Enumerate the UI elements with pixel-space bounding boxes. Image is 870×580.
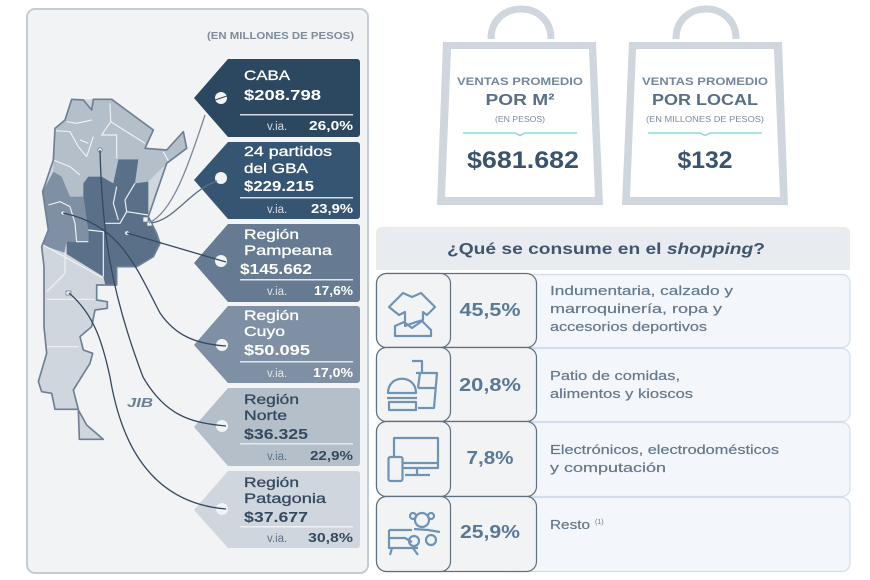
- tag: Norte: Región: [244, 391, 299, 407]
- bag: ventas por m2: VENTAS PROMEDIO: [457, 76, 584, 88]
- tag: Cuyo: Región: [244, 307, 299, 323]
- tag: Patagonia: $37.677: [244, 509, 308, 526]
- tag: GBA: [194, 142, 360, 219]
- tag: CABA: v.ia.: [267, 121, 287, 133]
- tag: Pampeana: Región: [244, 226, 299, 242]
- icon: toys: [389, 513, 440, 555]
- tag: CABA: $208.798: [244, 87, 321, 104]
- heading bar: ¿Qué se consume en el shopping ?: [447, 241, 765, 258]
- row: indumentaria: 45,5%: [460, 300, 520, 320]
- row: comidas: alimentos y kioscos: [550, 386, 694, 401]
- tag: Pampeana: $145.662: [240, 261, 312, 278]
- tag: Patagonia: v.ia.: [267, 533, 287, 545]
- leader lines: [63, 115, 226, 509]
- tag: Cuyo: v.ia.: [267, 368, 287, 380]
- location dots: [61, 148, 152, 295]
- icon: monitor and phone: [388, 438, 438, 481]
- row: electronicos: y computación: [550, 460, 666, 475]
- tag: Cuyo: $50.095: [244, 342, 310, 359]
- tag: GBA: $229.215: [244, 178, 314, 195]
- row: electronicos: 7,8%: [466, 448, 514, 468]
- icon: t-shirt and shoe: [389, 293, 435, 336]
- row: resto: Resto: [550, 517, 590, 532]
- tag: Pampeana: Pampeana: [244, 242, 332, 258]
- row: comidas: [376, 348, 850, 422]
- tag: Norte: 22,9%: [310, 448, 353, 463]
- bag: ventas por m2: POR M²: [486, 92, 554, 109]
- tag: GBA: del GBA: [244, 160, 309, 176]
- bag: ventas por local: [622, 9, 788, 205]
- bag: ventas por local: POR LOCAL: [652, 92, 758, 109]
- row: comidas: 20,8%: [459, 375, 521, 395]
- row: indumentaria: marroquinería, ropa y: [550, 301, 723, 316]
- logo mark: JIB: [127, 395, 153, 410]
- row: electronicos: Electrónicos, electrodomésticos: [550, 442, 780, 457]
- bag: ventas por local: VENTAS PROMEDIO: [642, 76, 769, 88]
- region: Norte: [53, 99, 187, 197]
- tag: Patagonia: [194, 471, 360, 548]
- tag: Cuyo: 17,0%: [313, 365, 353, 380]
- tag: CABA: [194, 59, 360, 137]
- row: indumentaria: accesorios deportivos: [550, 319, 708, 334]
- map of Argentina: [38, 99, 187, 439]
- tag: GBA: v.ia.: [267, 204, 287, 216]
- row: indumentaria: [376, 274, 850, 348]
- tag: Norte: [194, 388, 360, 466]
- tag: Patagonia: Patagonia: [244, 490, 326, 506]
- row: indumentaria: Indumentaria, calzado y: [550, 283, 734, 298]
- internal borders: [43, 103, 169, 347]
- row: resto: 25,9%: [460, 522, 520, 542]
- tag: Pampeana: [194, 224, 360, 302]
- region: Pampeana: [67, 159, 160, 285]
- tag: Norte: $36.325: [244, 426, 308, 443]
- panel: map and regions: [27, 9, 368, 573]
- tag: CABA: 26,0%: [309, 118, 354, 133]
- tag: Cuyo: Cuyo: [244, 323, 285, 339]
- units note: (EN MILLONES DE PESOS): [207, 31, 354, 42]
- region: Cuyo: [42, 172, 88, 253]
- tag: Patagonia: Región: [244, 474, 299, 490]
- tag: GBA: 24 partidos: [244, 143, 332, 159]
- row: electronicos: [376, 422, 850, 496]
- outline: [38, 99, 187, 409]
- row: comidas: Patio de comidas,: [550, 368, 680, 383]
- tag: CABA: CABA: [244, 67, 291, 83]
- bag: ventas por m2: (EN PESOS): [495, 115, 545, 124]
- tag: Patagonia: 30,8%: [308, 530, 354, 545]
- bag: ventas por m2: [437, 9, 603, 205]
- tag: Pampeana: 17,6%: [314, 283, 353, 298]
- heading bar: [376, 227, 850, 270]
- tag: Pampeana: v.ia.: [267, 286, 287, 298]
- icon: burger and drink: [387, 361, 437, 410]
- bag: ventas por m2: $681.682: [467, 147, 579, 174]
- region: Patagonia: [38, 99, 187, 409]
- row: resto: (1): [595, 519, 604, 526]
- tag: Cuyo: [194, 306, 360, 383]
- row: resto: [376, 496, 850, 572]
- bag: ventas por local: $132: [678, 147, 732, 174]
- bag: ventas por local: (EN MILLONES DE PESOS): [646, 115, 764, 124]
- tag: Norte: v.ia.: [267, 451, 287, 463]
- tag: Norte: Norte: [244, 407, 287, 423]
- tag: GBA: 23,9%: [311, 201, 353, 216]
